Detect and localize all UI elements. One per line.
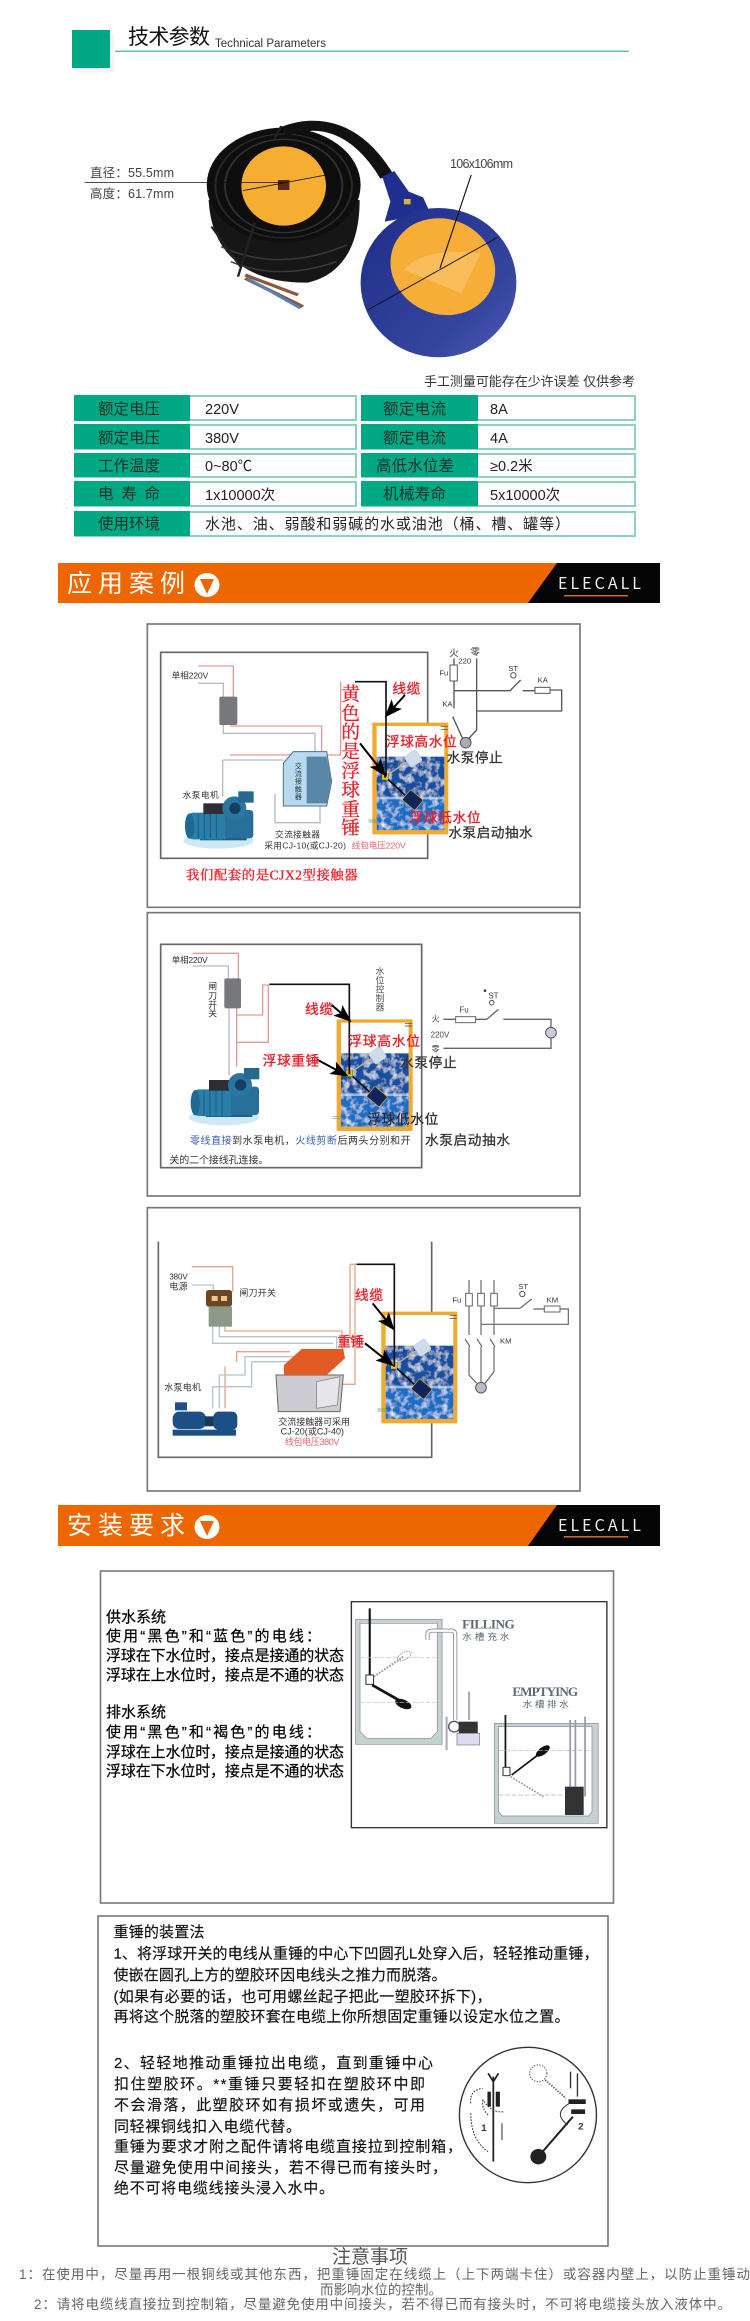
component labels: 开 <box>208 1000 217 1010</box>
circuit diagram: KM <box>500 1336 511 1345</box>
tank labels: 线缆 <box>305 1002 333 1017</box>
text: drainage system: 浮球在上水位时，接点是接通的状态 <box>106 1744 344 1761</box>
dimension label: diameter: 直径：55.5mm <box>90 166 174 180</box>
knife switch <box>219 697 237 725</box>
photo drawing: cable coil and ball <box>85 126 516 357</box>
row: service life: 1x10000次 <box>205 487 275 504</box>
component labels: 闸刀开关 <box>239 1287 276 1298</box>
circuit diagram: 零 <box>471 647 481 657</box>
product photo: float switch with cable and dimensions <box>85 126 516 357</box>
component labels <box>164 1273 350 1447</box>
emptying label: EMPTYING <box>512 1684 578 1699</box>
row: working temperature: ≥0.2米 <box>490 458 533 475</box>
circuit diagram <box>452 1280 568 1393</box>
vertical red label: 浮 <box>341 761 360 782</box>
panel: single phase 220V direct wiring <box>147 913 580 1196</box>
wiring <box>198 666 341 823</box>
circuit diagram <box>431 989 556 1054</box>
wiring <box>193 953 269 1075</box>
arrow to weight <box>317 1059 347 1075</box>
tank labels: 浮球高水位 <box>386 734 457 750</box>
diagram: filling and emptying <box>351 1602 607 1828</box>
pump <box>173 1402 237 1436</box>
tank with float <box>333 1019 413 1131</box>
text: step 2: 同轻裸铜线扣入电缆代替。 <box>114 2118 301 2136</box>
knife switch <box>206 1290 232 1327</box>
emptying label: 水槽排水 <box>523 1699 569 1710</box>
tank labels: 浮球高水位 <box>348 1033 420 1049</box>
component labels: 线包电压380V <box>285 1436 339 1447</box>
panel: single phase 220V wiring with contactor <box>147 624 580 907</box>
vertical red label: 色 <box>341 704 360 725</box>
circuit diagram: KM <box>547 1295 558 1304</box>
row: rated voltage 380V: 380V <box>205 431 239 447</box>
parameter table <box>74 395 635 536</box>
subheading: Technical Parameters <box>215 38 326 50</box>
tank with float <box>377 1312 457 1423</box>
circuit diagram: 火 <box>432 1015 440 1024</box>
component labels: 380V <box>169 1273 188 1282</box>
text: step 2: 扣住塑胶环。**重锤只要轻扣在塑胶环中即 <box>114 2076 425 2093</box>
icon: down arrow badge <box>194 1515 220 1539</box>
row: environment: 水池、油、弱酸和弱碱的水或油池（桶、槽、罐等） <box>205 515 570 533</box>
contactor <box>276 1349 345 1412</box>
diagram: weight circle <box>459 2047 596 2183</box>
cable line <box>357 1264 394 1367</box>
tank labels <box>337 1288 383 1350</box>
arrow to weight <box>360 743 385 775</box>
component labels: 单相220V <box>172 954 208 965</box>
contactor: 器 <box>295 793 302 801</box>
row: working temperature: 高低水位差 <box>376 457 454 475</box>
panel: weight installation method <box>98 1916 608 2246</box>
arrow to cable <box>386 695 405 716</box>
component labels: 采用CJ-10(或CJ-20) <box>264 839 346 850</box>
panel: water supply and drainage wiring <box>100 1571 614 1903</box>
banner: installation requirements <box>58 1505 660 1546</box>
text: step 2 <box>114 2055 462 2197</box>
text: supply system: 使用“黑色”和“蓝色”的电线： <box>106 1628 321 1645</box>
text: step 2: 2、轻轻地推动重锤拉出电缆，直到重锤中心 <box>114 2055 433 2072</box>
row: rated voltage 220V: 220V <box>205 402 239 418</box>
component labels: 线包电压220V <box>352 839 406 850</box>
section header: technical parameters <box>72 26 629 72</box>
filling label <box>462 1617 515 1643</box>
component labels: 电源 <box>169 1281 188 1292</box>
component labels: 水 <box>376 966 385 977</box>
circuit diagram: 220 <box>458 656 471 665</box>
notes text <box>19 2266 750 2312</box>
text: method heading and step 1: 使嵌在圆孔上方的塑胶环因电线头之推力而脱落。 <box>114 1967 446 1984</box>
component labels <box>172 954 385 1019</box>
row: working temperature <box>98 457 533 475</box>
circuit diagram: Fu <box>452 1295 461 1304</box>
tank labels: 水泵停止 <box>400 1055 457 1071</box>
tank labels: 线缆 <box>392 681 421 696</box>
tank with float <box>368 723 448 834</box>
circuit diagram: ST <box>488 991 499 1000</box>
notes text: 1：在使用中，尽量再用一根铜线或其他东西，把重锤固定在线缆上（上下两端卡住）或容器内壁上，以防止重锤动 <box>19 2266 750 2282</box>
component labels: 位 <box>376 975 385 986</box>
text: drainage system: 排水系统 <box>106 1704 166 1721</box>
text: supply system <box>106 1609 344 1684</box>
circuit diagram: Fu <box>459 1006 469 1015</box>
circuit diagram: ST <box>518 1282 528 1291</box>
filling label: 水槽充水 <box>462 1631 510 1643</box>
emptying tank <box>494 1715 598 1823</box>
notes text: 2：请将电缆线直接拉到控制箱，尽量避免使用中间接头，若不得已而有接头时，不可将电缆接头放入液体中。 <box>34 2296 731 2312</box>
text: drainage system: 浮球在下水位时，接点是不通的状态 <box>106 1763 344 1780</box>
pump <box>189 1068 259 1125</box>
tank labels <box>386 681 533 840</box>
circuit diagram: ST <box>508 664 518 673</box>
tank labels: 水泵停止 <box>447 750 503 766</box>
text: method heading and step 1: 再将这个脱落的塑胶环套在电缆上你所想固定重锤以设定水位之置。 <box>114 2008 570 2026</box>
tank labels: 浮球重锤 <box>263 1054 320 1069</box>
text: method heading and step 1: 1、将浮球开关的电线从重锤的中心下凹圆孔L处穿入后，轻轻推动重锤， <box>114 1946 598 1962</box>
component labels: 关 <box>208 1008 217 1019</box>
vertical red label: 是 <box>341 742 360 763</box>
tank labels: 水泵启动抽水 <box>448 825 533 840</box>
cable line <box>269 984 349 1073</box>
vertical red label: 的 <box>341 723 360 744</box>
filling tank <box>356 1608 479 1750</box>
panel: three phase 380V wiring <box>147 1208 580 1491</box>
pump <box>183 791 254 849</box>
text: method heading and step 1: 重锤的装置法 <box>114 1924 204 1941</box>
icon: down arrow badge <box>194 573 220 597</box>
component labels: 水泵电机 <box>183 789 219 800</box>
row: rated voltage 380V: 4A <box>490 431 508 447</box>
filling label: FILLING <box>462 1617 515 1631</box>
arrow to cable <box>332 1005 350 1021</box>
notes title: 注意事项 <box>332 2246 408 2268</box>
circuit diagram: Fu <box>439 668 448 677</box>
dimension label: height: 高度：61.7mm <box>90 186 174 201</box>
cable line <box>355 682 386 777</box>
row: service life: 5x10000次 <box>490 487 560 504</box>
component labels: 刀 <box>208 991 217 1001</box>
text: step 2: 不会滑落，此塑胶环如有损坏或遗失，可用 <box>114 2097 425 2114</box>
text: drainage system: 使用“黑色”和“褐色”的电线： <box>106 1724 321 1741</box>
contactor: 交 <box>295 761 302 770</box>
component labels: CJ-20(或CJ-40) <box>281 1425 344 1436</box>
row: rated voltage 220V <box>98 400 508 418</box>
row: service life: 电 寿 命 <box>98 485 160 503</box>
wiring note: 零线直接到水泵电机，火线剪断后两头分别和开 <box>190 1134 411 1147</box>
text: supply system: 供水系统 <box>106 1609 166 1626</box>
contactor: 接 <box>295 777 302 786</box>
tank labels: 重锤 <box>337 1335 364 1350</box>
emptying label <box>512 1684 578 1710</box>
text: step 2: 尽量避免使用中间接头，若不得已而有接头时， <box>114 2160 447 2176</box>
row: service life: 机械寿命 <box>383 485 446 503</box>
text: method heading and step 1: (如果有必要的话，也可用螺丝起子把此一塑胶环拆下)， <box>114 1988 492 2006</box>
vertical red label: 锤 <box>341 819 360 840</box>
component labels: 交流接触器 <box>275 828 320 839</box>
text: supply system: 浮球在上水位时，接点是不通的状态 <box>106 1667 344 1684</box>
dimension label: ball size: 106x106mm <box>450 157 513 171</box>
row: environment: 使用环境 <box>98 514 160 533</box>
contactor <box>283 752 332 806</box>
text: step 2: 重锤为要求才附之配件请将电缆直接拉到控制箱， <box>114 2138 462 2156</box>
row: service life <box>98 485 560 504</box>
text: step 2: 绝不可将电缆线接头浸入水中。 <box>114 2180 334 2197</box>
row: environment <box>98 514 570 533</box>
text: drainage system <box>106 1704 344 1780</box>
component labels: 水泵电机 <box>164 1381 201 1392</box>
banner title: 安装要求 <box>67 1506 185 1542</box>
knife switch <box>224 978 241 1008</box>
brand mark: ELECALL <box>558 1512 641 1536</box>
vertical red label: 黄 <box>341 685 361 706</box>
tank labels: 水泵启动抽水 <box>425 1133 510 1148</box>
component labels: 控 <box>376 984 385 995</box>
component labels: 单相220V <box>172 669 209 680</box>
measurement note: 手工测量可能存在少许误差 仅供参考 <box>424 374 635 389</box>
row: rated voltage 380V: 额定电压 <box>98 429 160 447</box>
row: working temperature: 0~80℃ <box>205 459 252 475</box>
contactor: 触 <box>295 784 302 793</box>
wiring <box>192 1264 357 1408</box>
caption: 我们配套的是CJX2型接触器 <box>186 866 358 882</box>
circuit diagram: 220V <box>431 1030 450 1039</box>
arrow to weight <box>365 1343 392 1365</box>
text: supply system: 浮球在下水位时，接点是接通的状态 <box>106 1648 344 1664</box>
circuit diagram <box>439 647 562 748</box>
row: rated voltage 220V: 8A <box>490 402 508 418</box>
row: rated voltage 380V: 额定电流 <box>383 429 446 447</box>
tank labels <box>263 1002 510 1148</box>
circuit diagram: 火 <box>449 648 459 658</box>
component labels: 制 <box>376 993 385 1004</box>
brand mark: ELECALL <box>558 570 641 594</box>
banner title: 应用案例 <box>67 564 185 600</box>
wiring note: 关的二个接线孔连接。 <box>169 1153 268 1166</box>
vertical red label: 重 <box>341 800 360 821</box>
circuit diagram: KA <box>538 676 549 685</box>
component labels: 闸 <box>208 981 217 991</box>
heading: 技术参数 <box>128 26 210 49</box>
banner: application examples <box>58 563 660 603</box>
circuit diagram: KA <box>442 700 453 709</box>
component labels: 器 <box>376 1003 385 1013</box>
contactor: 流 <box>295 769 302 778</box>
vertical red label: 球 <box>341 781 360 802</box>
component labels: 交流接触器可采用 <box>278 1416 350 1427</box>
row: rated voltage 220V: 额定电压 <box>98 400 160 418</box>
tank labels: 线缆 <box>355 1288 383 1303</box>
row: rated voltage 380V <box>98 429 508 447</box>
tank labels: 浮球低水位 <box>367 1112 439 1127</box>
tank labels: 浮球低水位 <box>409 811 481 826</box>
text: method heading and step 1 <box>114 1924 598 2026</box>
arrow to cable <box>373 1303 393 1329</box>
notes text: 而影响水位的控制。 <box>320 2282 442 2298</box>
diagram: weight circle: 2 <box>578 2121 584 2132</box>
circuit diagram: 零 <box>432 1045 440 1054</box>
diagram: weight circle: 1 <box>481 2123 487 2134</box>
row: working temperature: 工作温度 <box>98 457 160 475</box>
component labels <box>172 669 406 850</box>
row: rated voltage 220V: 额定电流 <box>383 400 446 418</box>
wiring note <box>169 1134 411 1166</box>
